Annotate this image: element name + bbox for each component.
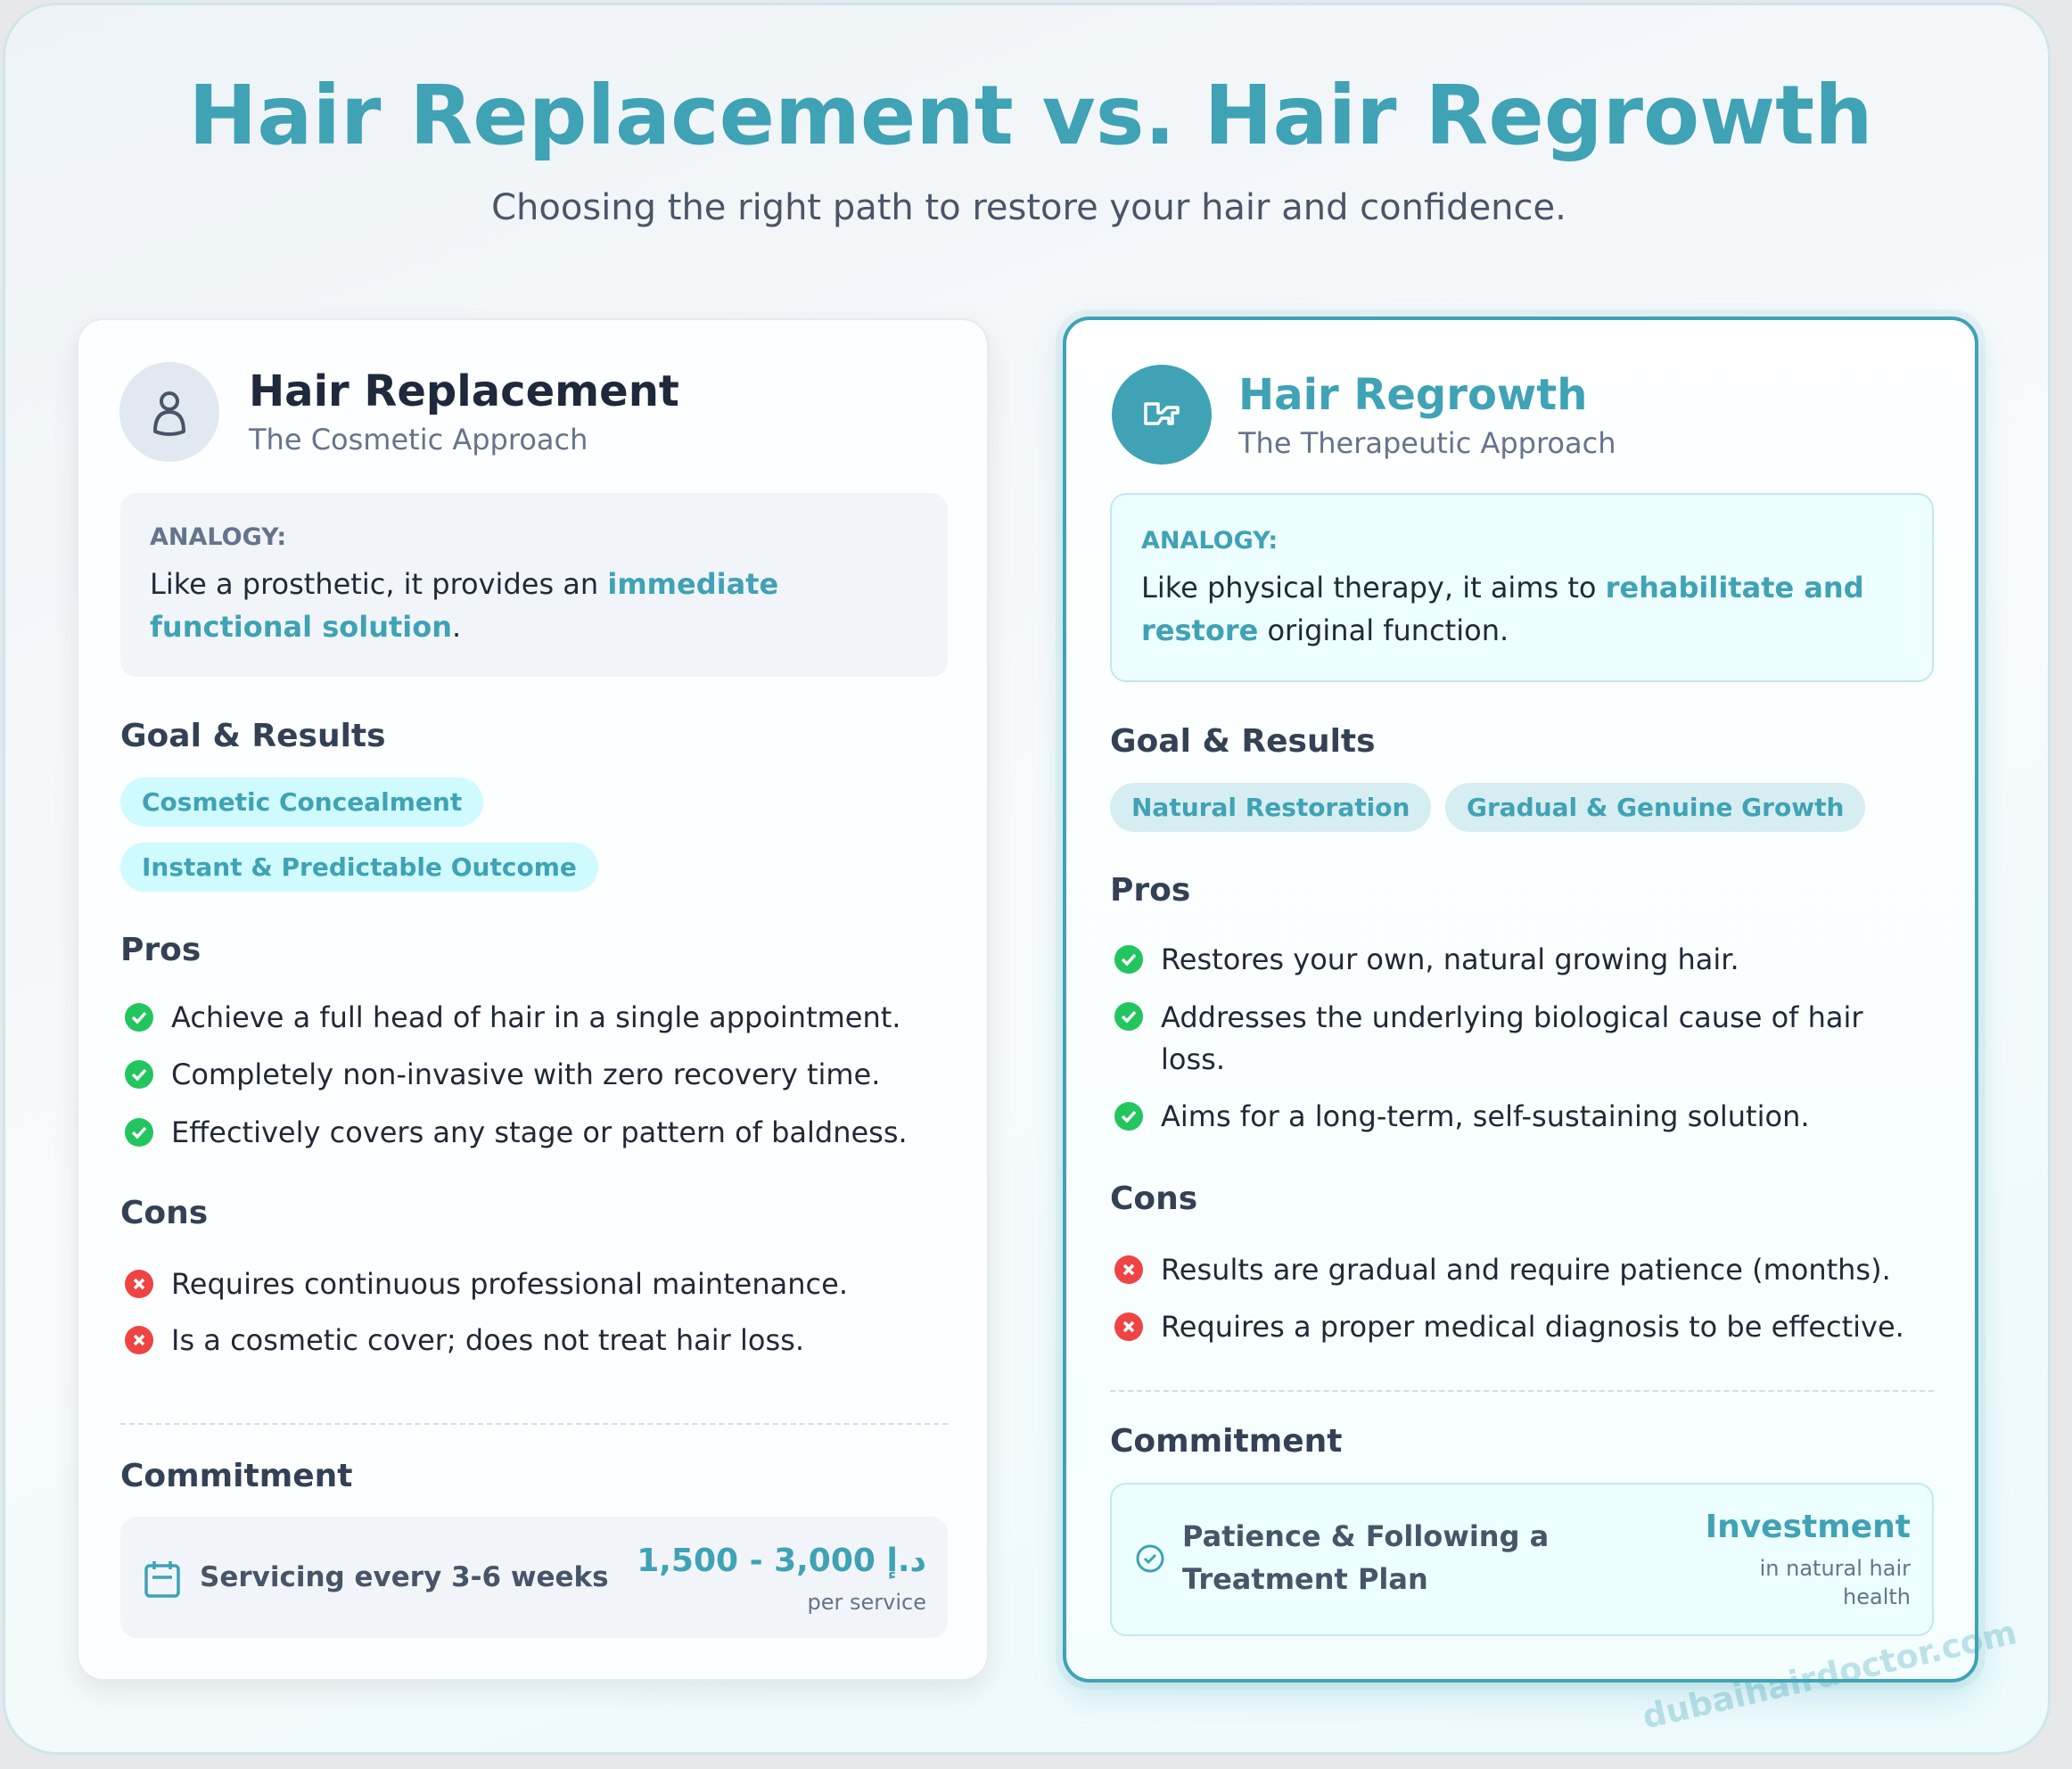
pill: Natural Restoration xyxy=(1131,793,1410,822)
analogy box xyxy=(120,493,948,677)
panel: hair regrowth xyxy=(1063,317,1978,1683)
commitment box: Patience & Following a xyxy=(1182,1519,1549,1553)
goal heading: Goal & Results xyxy=(120,718,386,754)
pill xyxy=(120,778,483,827)
pill xyxy=(1110,783,1431,832)
commitment box: per service xyxy=(808,1590,926,1615)
cons heading: Cons xyxy=(120,1195,208,1231)
subtitle: Choosing the right path to restore your hair and confidence. xyxy=(491,187,1566,228)
heading: Hair Regrowth xyxy=(1238,370,1587,420)
commitment box: Treatment Plan xyxy=(1182,1562,1428,1596)
cons heading: Cons xyxy=(1110,1181,1197,1217)
analogy box: Like physical therapy, it aims to rehabilitate and restore original function. xyxy=(1141,571,1864,647)
icon: calendar xyxy=(144,1561,180,1598)
subheading: The Cosmetic Approach xyxy=(249,423,588,457)
pros list: Effectively covers any stage or pattern of baldness. xyxy=(171,1115,908,1149)
commitment heading: Commitment xyxy=(120,1458,353,1494)
icon: check circle xyxy=(1136,1544,1164,1573)
goal heading: Goal & Results xyxy=(1110,723,1376,760)
pros list: Restores your own, natural growing hair. xyxy=(1161,942,1739,976)
pros heading: Pros xyxy=(1110,872,1190,909)
pros list xyxy=(125,1000,908,1149)
pill: Gradual & Genuine Growth xyxy=(1467,793,1844,822)
commitment box: in natural hair xyxy=(1760,1556,1911,1581)
pros list xyxy=(1114,942,1863,1133)
pill xyxy=(120,843,598,892)
panel: hair replacement xyxy=(77,318,989,1681)
icon: hair dryer xyxy=(1112,365,1212,465)
subheading: The Therapeutic Approach xyxy=(1238,426,1616,460)
commitment box: health xyxy=(1843,1584,1911,1609)
cons list xyxy=(125,1267,848,1357)
cons list: Results are gradual and require patience (months). xyxy=(1161,1253,1891,1287)
commitment heading: Commitment xyxy=(1110,1423,1343,1460)
cons list xyxy=(1114,1253,1904,1344)
commitment box xyxy=(1110,1483,1934,1636)
analogy box: ANALOGY: xyxy=(1141,527,1278,555)
commitment box: Servicing every 3-6 weeks xyxy=(200,1561,609,1593)
analogy box: Like a prosthetic, it provides an immediate functional solution. xyxy=(150,567,778,644)
cons list: Requires continuous professional maintenance. xyxy=(171,1267,848,1301)
watermark: dubaihairdoctor.com xyxy=(1639,1613,2020,1736)
pros list: Achieve a full head of hair in a single appointment. xyxy=(171,1000,900,1034)
analogy box: ANALOGY: xyxy=(150,523,286,551)
pill xyxy=(1445,783,1865,832)
pill: Cosmetic Concealment xyxy=(142,787,462,817)
cons list: Requires a proper medical diagnosis to be effective. xyxy=(1161,1310,1904,1344)
pros list: Aims for a long-term, self-sustaining solution. xyxy=(1161,1099,1810,1133)
title: Hair Replacement vs. Hair Regrowth xyxy=(188,68,1873,163)
pill: Instant & Predictable Outcome xyxy=(142,852,577,882)
icon: person xyxy=(119,362,219,462)
pros heading: Pros xyxy=(120,932,201,968)
commitment box: 1,500 - 3,000 د.إ xyxy=(637,1543,926,1579)
commitment box xyxy=(120,1517,948,1638)
cons list: Is a cosmetic cover; does not treat hair loss. xyxy=(171,1323,804,1357)
heading: Hair Replacement xyxy=(249,366,679,416)
pros list: Addresses the underlying biological cause of hair loss. xyxy=(1161,1000,1863,1076)
pros list: Completely non-invasive with zero recovery time. xyxy=(171,1057,880,1091)
commitment box: Investment xyxy=(1706,1509,1911,1545)
analogy box xyxy=(1110,493,1934,682)
